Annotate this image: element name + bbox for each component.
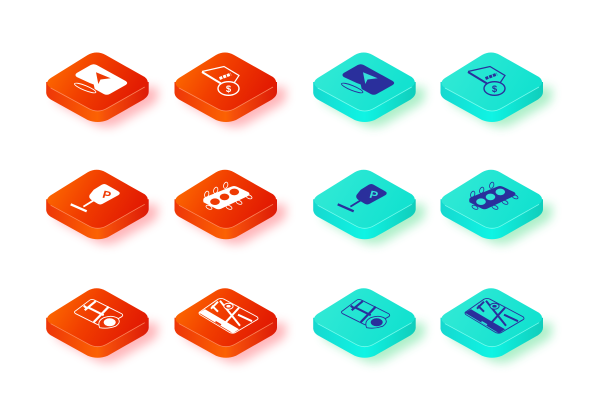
icon: map with location pin bbox=[341, 299, 390, 328]
tile: cyan tablet map bbox=[440, 288, 552, 363]
tile: cyan navigation bubble bbox=[313, 52, 425, 127]
icon: engine block bbox=[469, 182, 519, 210]
icon: speech bubble with navigation arrow bbox=[74, 64, 127, 95]
label: P: P bbox=[101, 189, 112, 202]
tile: red map with pin bbox=[46, 288, 158, 363]
label: dollar: $ bbox=[226, 84, 232, 95]
tile: red engine block bbox=[174, 170, 286, 244]
tile: cyan map with pin bbox=[313, 288, 425, 363]
icon: speech bubble with navigation arrow bbox=[341, 64, 394, 95]
tile: cyan engine block bbox=[440, 170, 552, 244]
icon: tablet with map bbox=[199, 298, 258, 333]
label: P: P bbox=[368, 189, 379, 202]
icon: map with location pin bbox=[74, 299, 123, 328]
tile: cyan road with dollar bbox=[440, 52, 552, 127]
label: dollar: $ bbox=[492, 84, 498, 95]
tile: cyan parking sign bbox=[313, 170, 425, 244]
tile: red road with dollar bbox=[174, 52, 286, 127]
tile: red navigation bubble bbox=[46, 52, 158, 127]
tile: red tablet map bbox=[174, 288, 286, 363]
tile: red parking sign bbox=[46, 170, 158, 244]
icon: engine block bbox=[203, 182, 253, 210]
icon: tablet with map bbox=[465, 298, 524, 333]
